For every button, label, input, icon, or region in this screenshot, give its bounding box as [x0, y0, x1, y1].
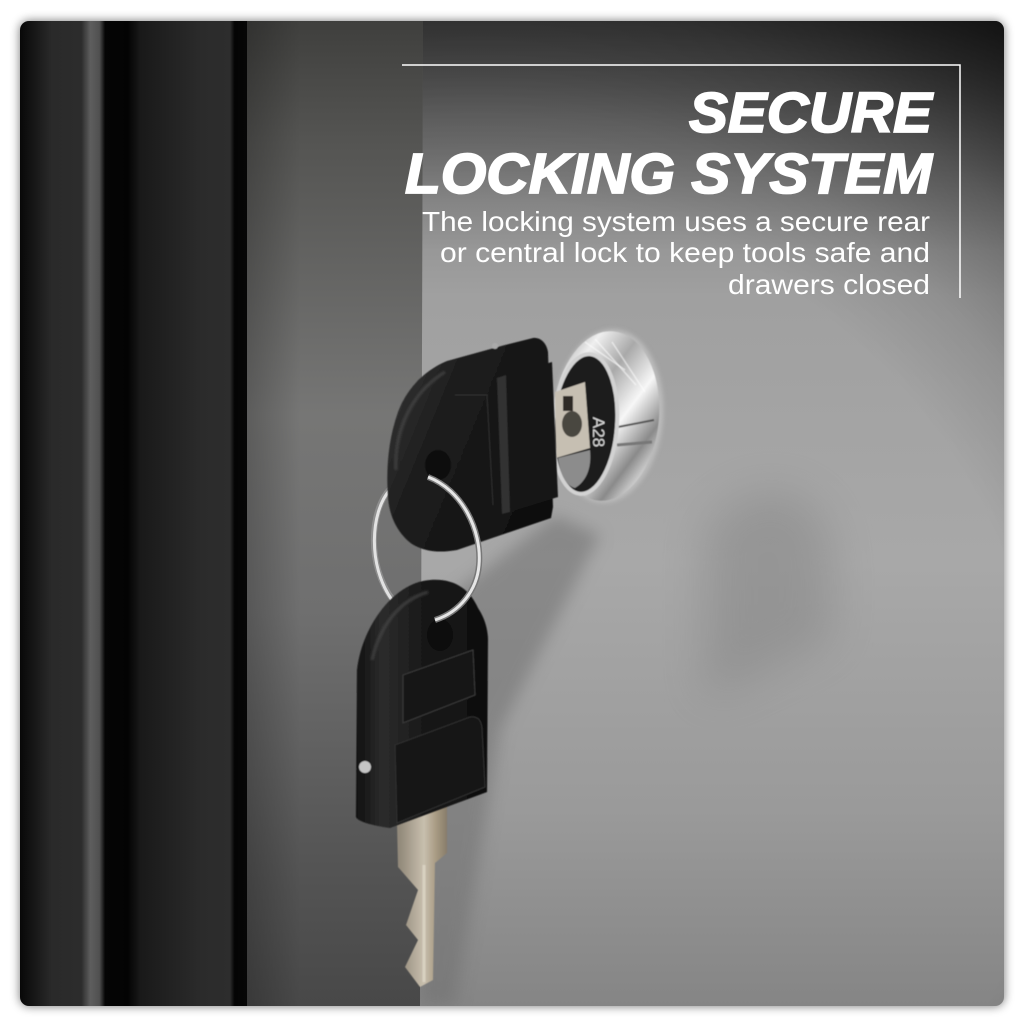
black cabinet frame [20, 21, 247, 1006]
heading: LOCKING SYSTEM [405, 142, 934, 206]
description text: The locking system uses a secure rear [422, 206, 930, 237]
lower key head [356, 580, 488, 828]
lower key dot [359, 761, 371, 773]
key blade in lock [555, 382, 590, 458]
description text: drawers closed [728, 269, 930, 300]
lower key hole [427, 619, 453, 651]
lock cylinder [554, 328, 664, 504]
bezel halo [558, 328, 664, 504]
bezel reflections [585, 340, 640, 385]
upper key highlight [396, 372, 445, 470]
door shading [420, 21, 1004, 1006]
text frame lines [402, 65, 960, 298]
lower key slider [395, 717, 485, 823]
description text [422, 206, 930, 300]
lower key highlight [372, 592, 428, 660]
lock number: A28 [589, 417, 608, 447]
upper key slider [513, 362, 559, 512]
upper key hole [425, 450, 451, 480]
grey side panel [247, 21, 425, 1006]
door top shading [422, 21, 1004, 212]
chrome bezel [559, 330, 660, 502]
description text: or central lock to keep tools safe and [440, 237, 930, 268]
key shadow on door [420, 515, 600, 1006]
heading [405, 81, 934, 206]
key ring back arc [374, 489, 393, 600]
lock face [554, 352, 620, 496]
lower key blade [397, 806, 447, 987]
door vignette [423, 21, 1004, 451]
key ring front arc [428, 477, 479, 620]
heading: SECURE [689, 81, 934, 145]
door surface [420, 21, 1004, 1006]
upper key recess [455, 395, 493, 505]
side panel left falloff [247, 21, 283, 1006]
lower key label recess [403, 650, 475, 723]
lower face reflection [558, 450, 590, 488]
faint key reflection [705, 491, 832, 700]
upper key head [387, 338, 558, 552]
